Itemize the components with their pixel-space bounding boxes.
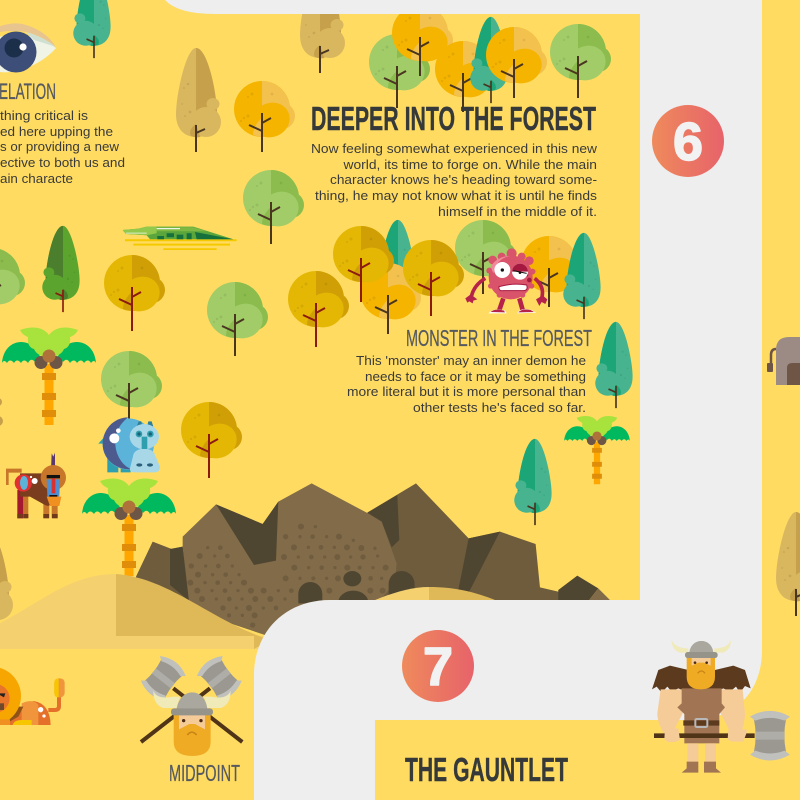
elephant	[767, 337, 800, 385]
badge: number 6: 6	[673, 112, 703, 172]
mountain texture dots	[153, 524, 389, 628]
tree cluster: top forest	[369, 5, 611, 117]
mountains	[136, 483, 613, 637]
palm tree: centre	[82, 479, 176, 576]
text block: revelation: thing critical is	[0, 108, 89, 123]
tree row: top left trees	[73, 0, 345, 246]
text block: deeper into the forest: world, its time to forge on. While the main	[342, 157, 597, 172]
heading: revelation: ELATION	[0, 79, 56, 104]
text block: revelation: ain characte	[0, 171, 73, 186]
icon: eye	[0, 23, 56, 72]
palm tree: left	[2, 328, 96, 425]
text block: deeper into the forest: character knows he's heading toward some-	[330, 172, 597, 187]
text block: deeper into the forest: himself in the middle of it.	[438, 204, 597, 219]
tree cluster: lower forest	[288, 220, 601, 347]
baboon	[6, 453, 66, 518]
big viking with axe	[652, 640, 790, 773]
tree: tan stub left edge	[0, 398, 3, 426]
text block: revelation: s or providing a new	[0, 139, 120, 154]
crocodile	[123, 227, 237, 250]
badge: number 6	[652, 105, 724, 177]
tree group: left and centre	[0, 226, 633, 525]
road	[165, 0, 762, 800]
label: midpoint: MIDPOINT	[169, 760, 240, 786]
sand dunes	[0, 574, 495, 649]
monster	[465, 248, 547, 313]
badge: number 7: 7	[423, 637, 453, 697]
text block: monster in the forest: This 'monster' may an inner demon he	[356, 353, 586, 368]
caves	[298, 571, 415, 614]
text block: monster in the forest: other tests he's faced so far.	[413, 400, 586, 415]
heading: deeper into the forest: DEEPER INTO THE FOREST	[311, 100, 596, 137]
hippo	[98, 417, 160, 472]
heading: monster in the forest: MONSTER IN THE FOREST	[406, 325, 592, 351]
heading: the gauntlet: THE GAUNTLET	[405, 751, 568, 788]
text block: deeper into the forest: Now feeling somewhat experienced in this new	[311, 141, 598, 156]
viking head and crossed axes	[138, 652, 245, 756]
lion	[0, 667, 65, 725]
text block: monster in the forest: more literal but it is more personal than	[347, 384, 586, 399]
text block: deeper into the forest	[311, 141, 598, 219]
text block: revelation	[0, 108, 125, 186]
palm tree: small right	[564, 416, 630, 484]
badge: number 7	[402, 630, 474, 702]
text block: revelation: ed here upping the	[0, 124, 113, 139]
text block: deeper into the forest: thing, he may not know what it is until he finds	[315, 188, 598, 203]
tree: tan tall left edge	[0, 531, 13, 635]
text block: monster in the forest	[347, 353, 586, 415]
text block: revelation: ective to both us and	[0, 155, 125, 170]
tree: tan tall right	[776, 512, 800, 616]
text block: monster in the forest: needs to face or it may be something	[365, 369, 586, 384]
